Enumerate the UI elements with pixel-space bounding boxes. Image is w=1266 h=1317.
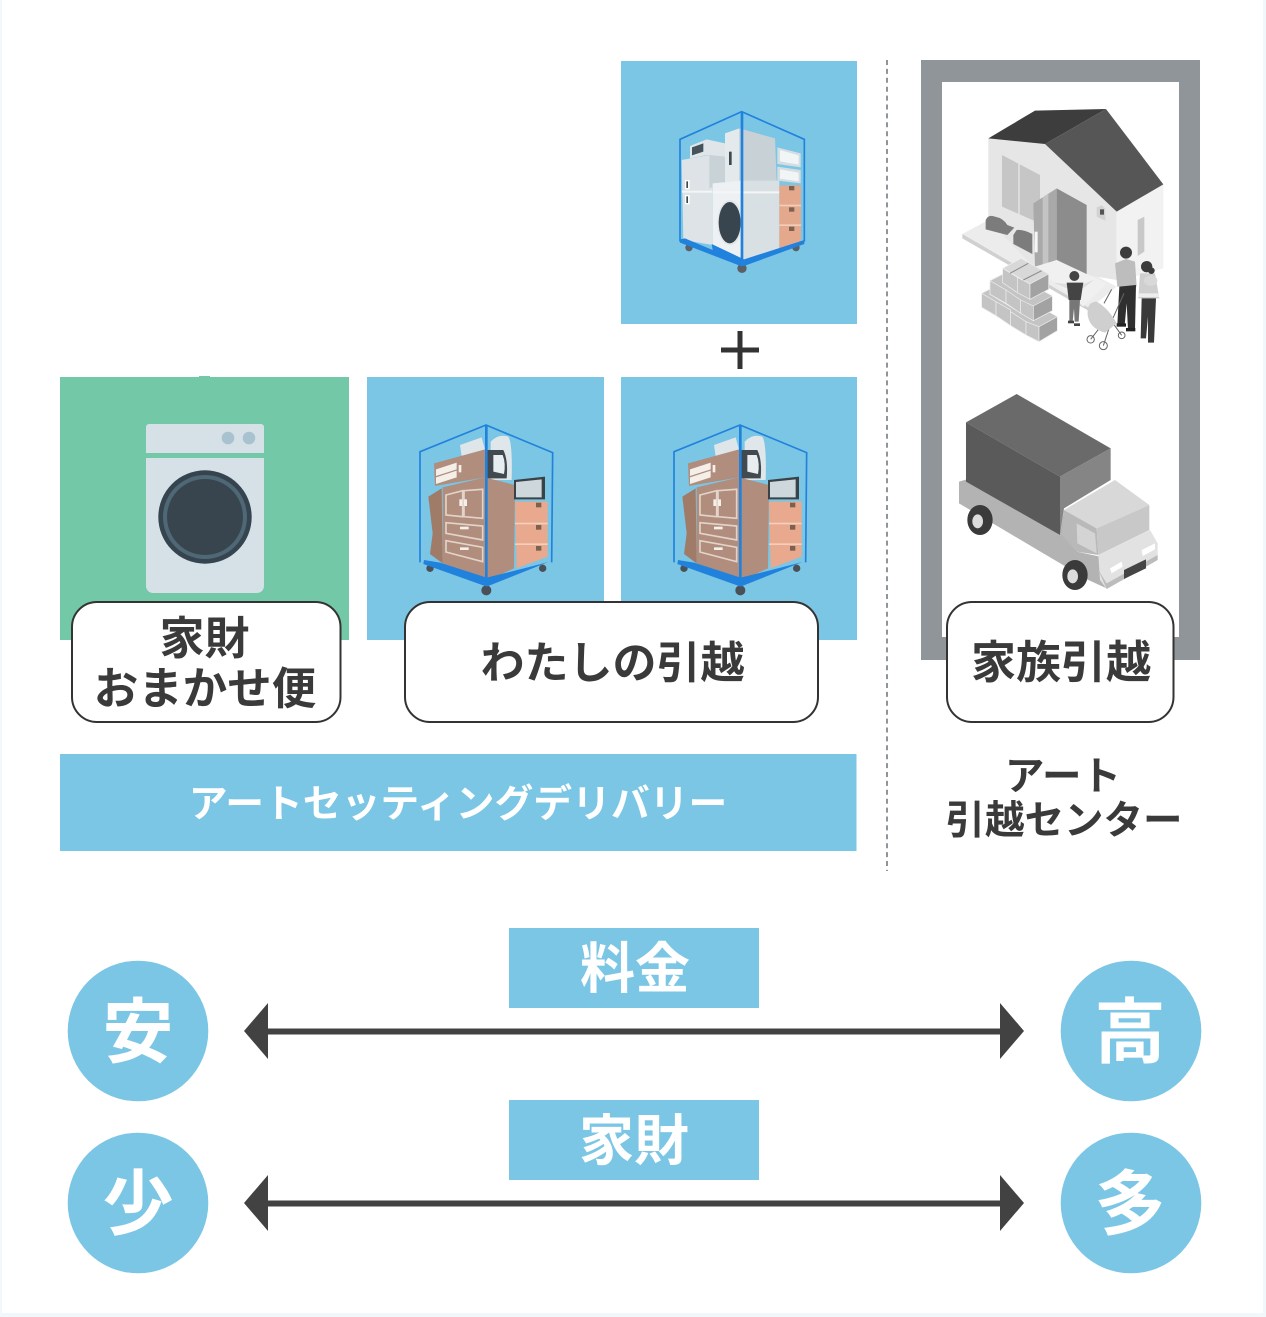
label: my move: わたしの引越 (480, 639, 744, 688)
heading: price: 料金 (580, 938, 690, 1000)
badge: few goods: 少 (102, 1166, 174, 1245)
badge: low price (68, 961, 208, 1101)
badge: many goods (1061, 1133, 1201, 1273)
badge: low price: 安 (102, 994, 174, 1073)
icon: house with family and boxes (962, 109, 1163, 350)
icon: washing machine (146, 424, 264, 593)
label: household goods service: おまかせ便 (94, 665, 316, 714)
banner: art setting delivery (60, 754, 856, 851)
panel: household goods service (green) (60, 376, 349, 640)
panel: my move cage, left (367, 377, 604, 640)
label: household goods service: 家財 (159, 613, 250, 664)
dotted divider (886, 60, 888, 871)
mother with baby (1138, 261, 1159, 343)
heading: household goods (509, 1100, 759, 1180)
father (1115, 247, 1137, 331)
panel: family move frame (921, 60, 1200, 660)
label: family move (947, 602, 1174, 722)
banner: art setting delivery: アートセッティングデリバリー (189, 782, 727, 826)
panel: appliances cage (top right blue) (621, 61, 857, 324)
heading: price (509, 928, 759, 1008)
badge: few goods (68, 1133, 208, 1273)
panel: my move cage, right (621, 377, 857, 640)
arrow: goods scale (244, 1175, 1024, 1231)
badge: many goods: 多 (1094, 1166, 1166, 1245)
caption: art moving center: アート (1005, 755, 1121, 799)
boxes (982, 258, 1057, 342)
arrow: price scale (244, 1003, 1024, 1059)
label: my move (405, 602, 818, 722)
icon: truck (959, 394, 1158, 590)
stroller (1087, 289, 1125, 350)
caption: art moving center: 引越センター (946, 799, 1182, 843)
label: household goods service (72, 602, 340, 722)
plus sign (721, 331, 759, 369)
caption: art moving center (946, 755, 1182, 843)
heading: household goods: 家財 (579, 1110, 689, 1172)
badge: high price (1061, 961, 1201, 1101)
badge: high price: 高 (1094, 994, 1166, 1073)
child (1053, 271, 1094, 326)
label: family move: 家族引越 (971, 637, 1151, 688)
